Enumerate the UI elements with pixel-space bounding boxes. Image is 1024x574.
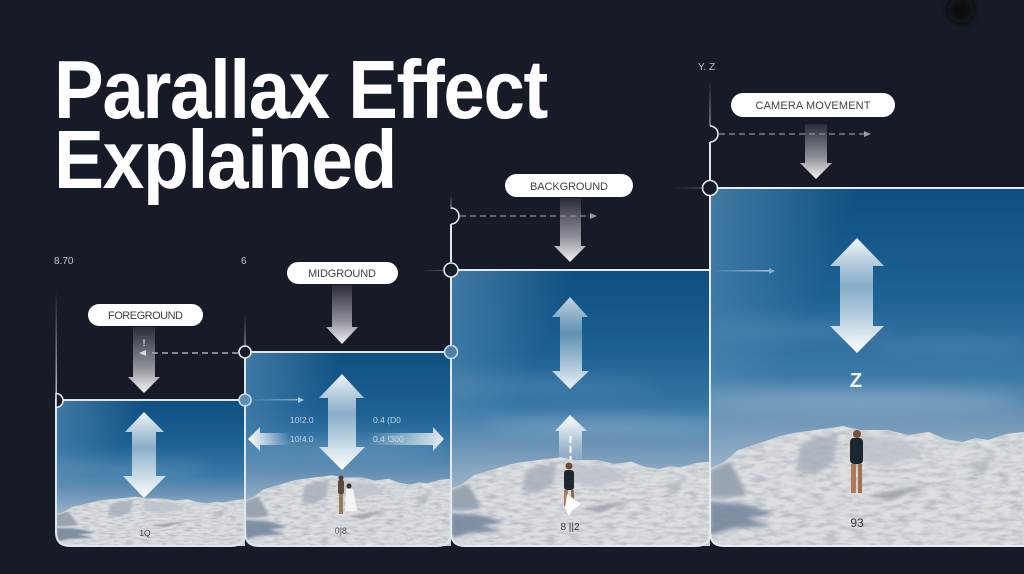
midground values <box>290 415 404 536</box>
scale labels: Y. Z <box>698 62 715 73</box>
connector lines <box>56 80 775 400</box>
label: camera movement pill with arrow: CAMERA MOVEMENT <box>756 100 871 112</box>
label: background pill with arrow <box>505 174 633 262</box>
label: foreground pill with arrow: ! <box>142 338 146 348</box>
dashed arrow: camera <box>719 131 871 137</box>
label: foreground pill with arrow <box>88 304 203 393</box>
title: Parallax Effect <box>54 43 548 136</box>
background small up arrow <box>555 415 587 462</box>
background value: 8 ||2 <box>560 522 580 533</box>
foreground double arrow <box>123 412 166 498</box>
midground scene <box>240 352 460 546</box>
camera figure <box>850 430 863 493</box>
background outline <box>451 270 710 546</box>
connector nodes <box>56 126 718 408</box>
panel: midground <box>240 352 460 546</box>
camera scene <box>700 188 1024 546</box>
midground left arrow <box>248 427 290 451</box>
scale labels <box>54 62 715 267</box>
camera double arrow <box>830 238 884 353</box>
camera outline <box>710 188 1024 546</box>
title <box>54 43 548 206</box>
axis letter Z: Z <box>850 370 862 392</box>
dashed arrow: foreground <box>139 350 238 356</box>
label: midground pill with arrow: MIDGROUND <box>308 268 376 280</box>
background white marker <box>565 494 581 516</box>
midground values: 0.4 (D0 <box>373 415 401 425</box>
panel: foreground <box>55 399 245 547</box>
label: background pill with arrow: BACKGROUND <box>530 181 608 193</box>
midground right arrow <box>367 427 444 451</box>
title: Explained <box>54 113 396 206</box>
background dashed centre line <box>570 436 572 460</box>
foreground outline <box>56 400 245 546</box>
midground values: 10!4.0 <box>290 434 314 444</box>
camera value: 93 <box>850 516 864 530</box>
scale labels: 6 <box>241 256 247 267</box>
midground values: 10!2.0 <box>290 415 314 425</box>
midground values: 0|8. <box>335 526 349 536</box>
foreground scene <box>57 401 245 546</box>
label: foreground pill with arrow: FOREGROUND <box>108 310 183 322</box>
midground outline <box>245 352 451 546</box>
label: camera movement pill with arrow <box>731 93 895 179</box>
background scene <box>452 271 710 546</box>
decorative dark smudge <box>948 0 974 23</box>
panel: camera movement <box>700 188 1024 546</box>
midground values: 0.4 !300 <box>373 434 404 444</box>
background figure <box>564 462 574 506</box>
label: midground pill with arrow <box>287 262 398 344</box>
midground double arrow <box>319 374 365 470</box>
foreground value: 1Q <box>139 528 151 538</box>
background double arrow <box>552 297 589 389</box>
midground figures <box>338 476 357 514</box>
dashed arrow: background <box>460 213 597 219</box>
panel: background <box>450 269 710 547</box>
midground motion line <box>251 397 304 403</box>
scale labels: 8.70 <box>54 256 74 267</box>
